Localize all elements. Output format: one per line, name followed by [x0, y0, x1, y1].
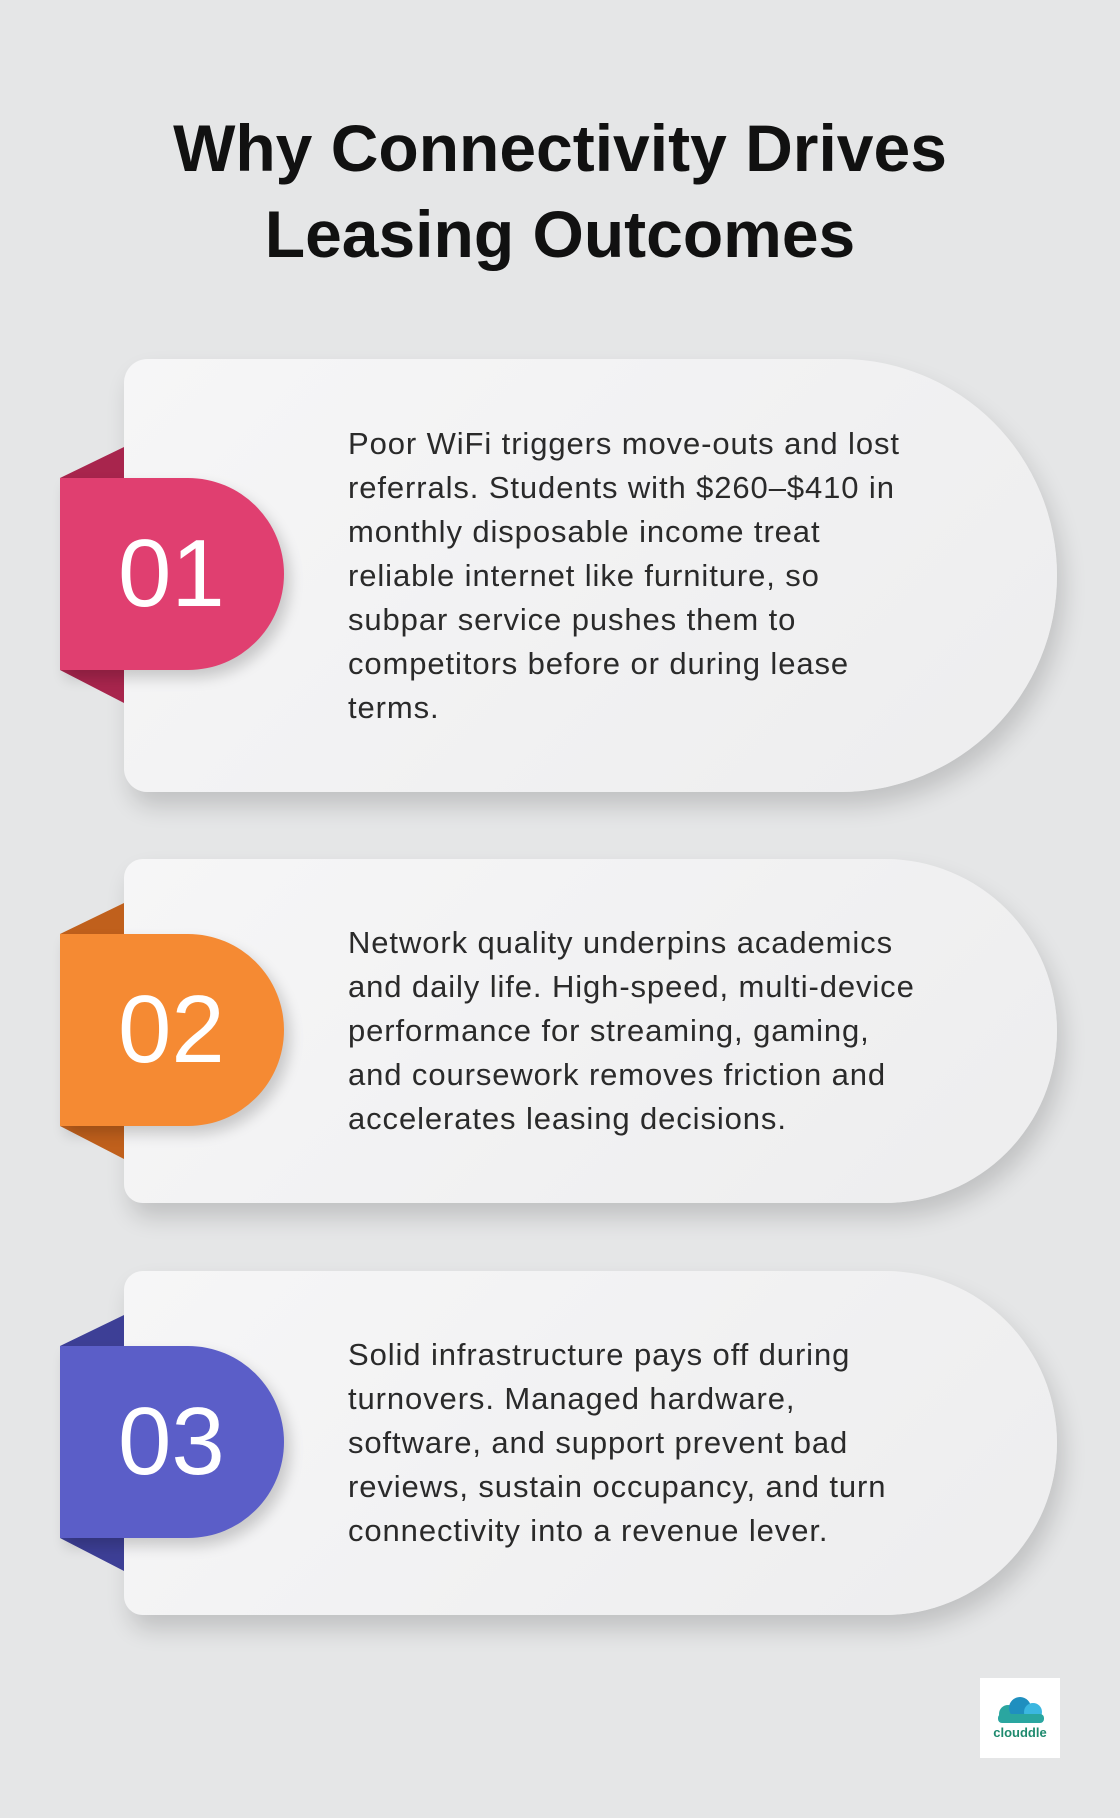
text: card 1: monthly disposable income treat — [348, 514, 820, 548]
fold bottom 3 — [60, 1538, 124, 1571]
number tab 01 — [60, 478, 284, 670]
logo: clouddle — [993, 1725, 1047, 1740]
text: card 1: Poor WiFi triggers move-outs and lost — [348, 426, 900, 460]
text: card 3 — [348, 1337, 886, 1548]
number tab 02 — [60, 934, 284, 1126]
number tab 03: 03 — [118, 1388, 225, 1495]
fold top 3 — [60, 1315, 124, 1346]
text: card 1: terms. — [348, 690, 440, 724]
text: card 3: software, and support prevent bad — [348, 1425, 848, 1460]
title: Leasing Outcomes — [265, 197, 855, 271]
title — [173, 111, 947, 271]
text: card 1: subpar service pushes them to — [348, 602, 796, 636]
text: card 2: and coursework removes friction and — [348, 1057, 886, 1092]
panel: card 1 — [124, 359, 1057, 792]
text: card 3: Solid infrastructure pays off during — [348, 1337, 850, 1372]
text: card 3: turnovers. Managed hardware, — [348, 1381, 795, 1416]
text: card 2: performance for streaming, gaming, — [348, 1013, 870, 1048]
fold top 2 — [60, 903, 124, 934]
number tab 02: 02 — [118, 976, 225, 1083]
text: card 1: reliable internet like furniture, so — [348, 558, 820, 592]
panel: card 2 — [124, 859, 1057, 1203]
text: card 3: reviews, sustain occupancy, and turn — [348, 1469, 886, 1504]
text: card 1: competitors before or during lease — [348, 646, 849, 680]
text: card 2 — [348, 925, 915, 1136]
text: card 2: Network quality underpins academics — [348, 925, 893, 960]
fold bottom 1 — [60, 670, 124, 703]
number tab 01: 01 — [118, 520, 225, 627]
text: card 2: accelerates leasing decisions. — [348, 1101, 787, 1136]
logo — [980, 1678, 1060, 1758]
text: card 3: connectivity into a revenue lever. — [348, 1513, 828, 1548]
text: card 2: and daily life. High-speed, multi-device — [348, 969, 915, 1004]
text: card 1: referrals. Students with $260–$410 in — [348, 470, 895, 504]
panel: card 3 — [124, 1271, 1057, 1615]
title: Why Connectivity Drives — [173, 111, 947, 185]
text: card 1 — [348, 426, 900, 724]
number tab 03 — [60, 1346, 284, 1538]
fold top 1 — [60, 447, 124, 478]
fold bottom 2 — [60, 1126, 124, 1159]
